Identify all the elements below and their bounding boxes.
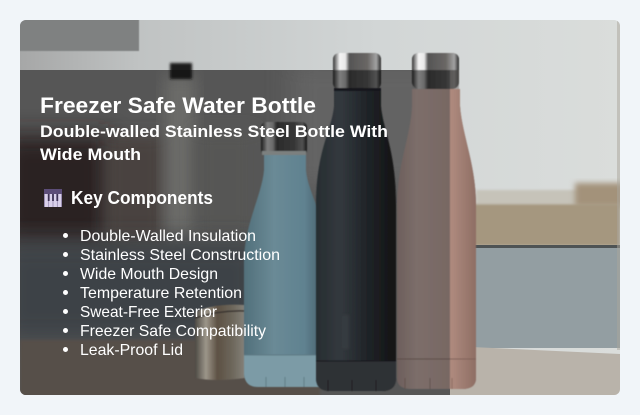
icon: piano keys [44,189,62,207]
component list: Wide Mouth Design [80,266,218,283]
steel cup [195,305,245,380]
teal bottle [244,122,320,388]
pink bottle [397,53,476,389]
component list: Freezer Safe Compatibility [80,323,266,340]
section heading: key components: Key Components [71,188,213,208]
component list: Leak-Proof Lid [80,342,183,359]
dark translucent overlay [20,70,450,395]
subtitle [40,122,388,164]
title: Freezer Safe Water Bottle [40,93,316,118]
subtitle: Wide Mouth [40,145,141,164]
component list: Sweat-Free Exterior [80,304,218,321]
dark bottle [316,53,396,391]
component list: Stainless Steel Construction [80,247,280,264]
component list: Temperature Retention [80,285,242,302]
component list: Double-Walled Insulation [80,228,256,245]
component list [63,228,280,359]
subtitle: Double-walled Stainless Steel Bottle With [40,122,388,141]
